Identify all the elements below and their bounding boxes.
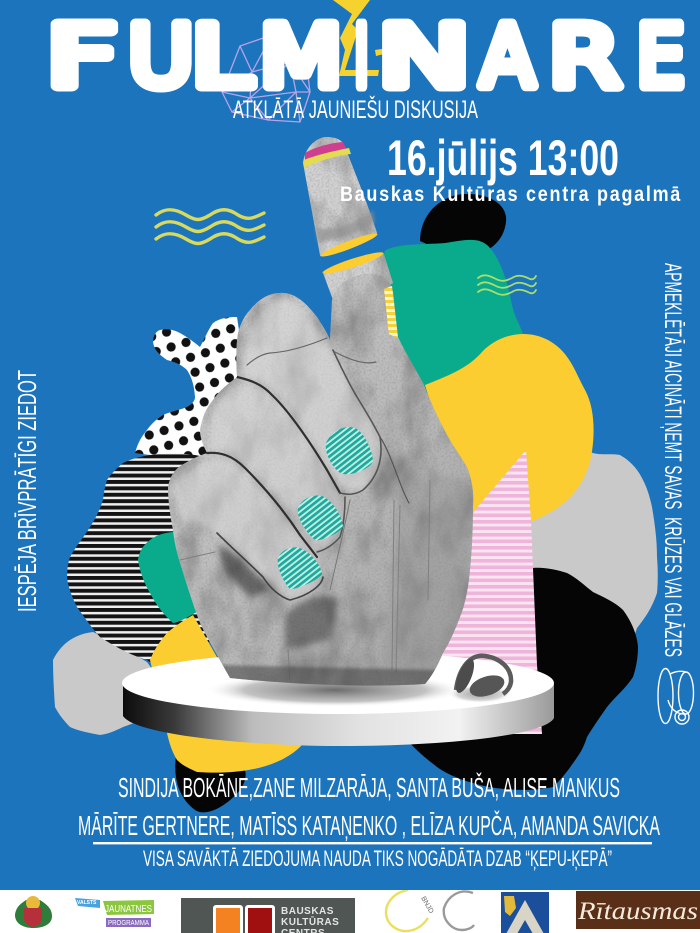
logo: Bauskas Kulturas Centrs: KULTŪRAS (281, 916, 339, 928)
blob: black under pedestal (175, 745, 246, 812)
icon: lightning bolt (333, 0, 413, 76)
pedestal (122, 652, 554, 746)
title: L (191, 8, 252, 107)
logo: youth programme (75, 898, 154, 927)
divider line (93, 842, 652, 844)
logo: BNJD (386, 890, 474, 931)
blob: grey left (53, 632, 175, 735)
blob: black top (420, 194, 506, 250)
right vertical note: APMEKLĒTĀJI AICINĀTI ŅEMT SAVAS KRŪZES VAI GLĀZES (659, 263, 686, 657)
logo: Bauskas Kulturas Centrs: BAUSKAS (281, 906, 334, 917)
title: A (480, 8, 535, 107)
nails (278, 427, 373, 589)
title: E (636, 8, 685, 107)
logo: BNJD: BNJD (419, 896, 434, 915)
gap in finger (320, 233, 385, 274)
blob: black right (410, 568, 638, 790)
icon: yellow waves (156, 210, 264, 244)
blob: yellow left (150, 615, 302, 773)
logo: youth programme: PROGRAMMA (108, 920, 149, 927)
icon: cup (658, 668, 694, 724)
statue: hand (168, 274, 473, 690)
statue: raised finger (303, 137, 393, 310)
icon: headphones (452, 656, 511, 701)
left vertical note: IESPĒJA BRĪVPRĀTĪGI ZIEDOT (12, 370, 42, 612)
logo: Ritausmas (576, 891, 700, 929)
blob: dotted (135, 317, 260, 470)
blob: green left (138, 530, 205, 623)
title: R (549, 8, 621, 107)
subtitle: ATKLĀTĀ JAUNIEŠU DISKUSIJA (233, 95, 478, 124)
nail: middle (326, 427, 373, 474)
title: U (128, 8, 194, 107)
finger highlights (240, 298, 381, 491)
logo: coat of arms (15, 896, 52, 928)
blob: yellow right (425, 334, 594, 530)
title: F (46, 8, 117, 107)
nail: little (278, 547, 322, 589)
yellow stripes beside thumb (384, 286, 398, 338)
blob: black striped (67, 454, 215, 662)
logo: Ritausmas: Rītausmas (577, 898, 698, 925)
dark creases (180, 338, 430, 680)
logo: youth programme: JAUNATNES (105, 904, 152, 915)
nail: ring (298, 496, 343, 540)
blob: grey right (520, 452, 658, 640)
icon: geodesic sphere (222, 35, 310, 122)
logo: Bauskas Kulturas Centrs (181, 898, 355, 933)
footer logo strip (0, 890, 700, 933)
dark shading (218, 545, 270, 597)
blob: green right (383, 240, 523, 400)
title: I (354, 8, 369, 107)
title: N (378, 8, 470, 107)
logo: Bauska shield (501, 892, 549, 933)
blob: pink striped triangle (440, 450, 542, 734)
icon: green waves (478, 275, 536, 295)
title: M (260, 8, 342, 107)
logo: youth programme: VALSTS (77, 900, 97, 906)
